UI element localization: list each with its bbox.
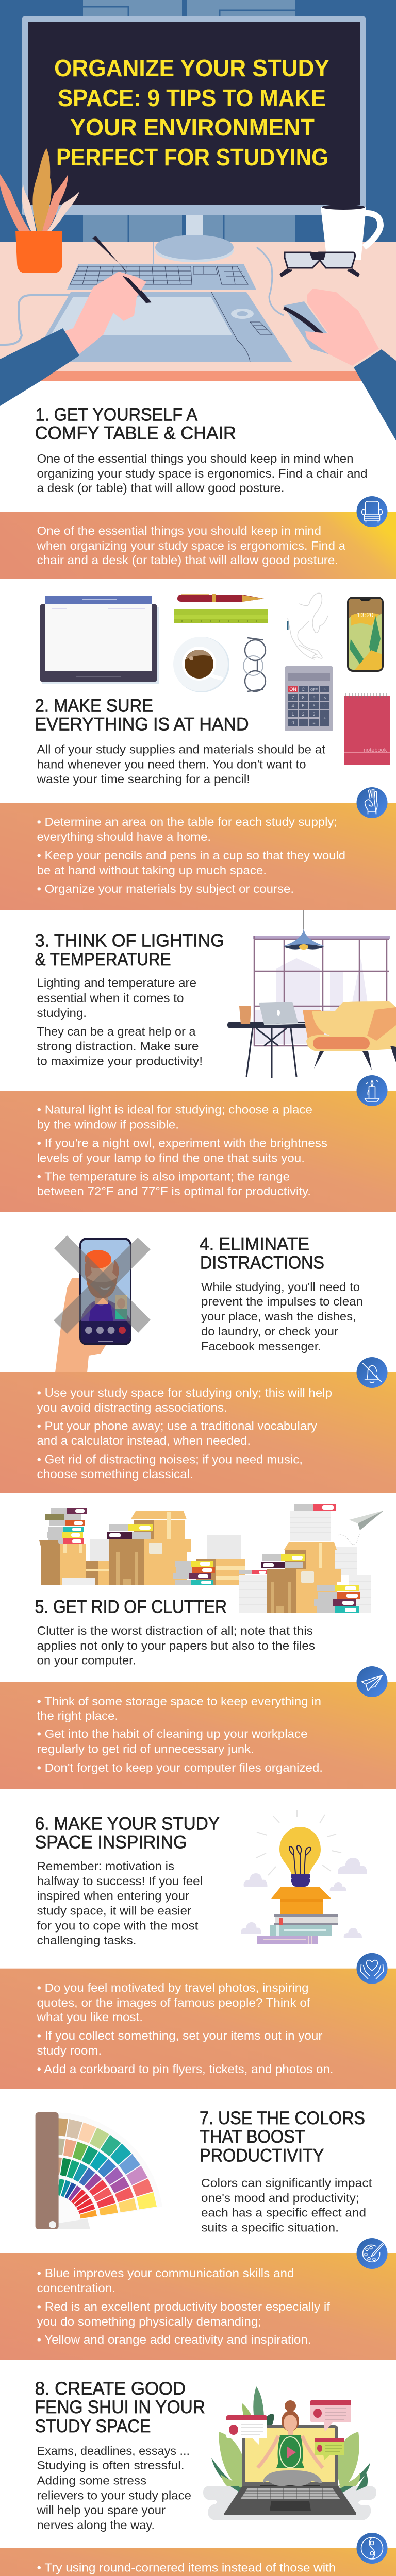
keyboard [67, 264, 256, 290]
ruler [174, 609, 268, 623]
section 1 body text [37, 452, 367, 495]
section 3 body text [37, 976, 203, 1068]
coffee mug [321, 205, 381, 260]
panel: tip 6 bullets: study room. [37, 2044, 102, 2057]
icon: muted bell [357, 1357, 388, 1388]
section 4 body text: your place, wash the dishes, [201, 1310, 356, 1323]
section 8 body text: Adding some stress [37, 2474, 146, 2487]
section 2 heading: EVERYTHING IS AT HAND [35, 715, 249, 735]
pen [177, 594, 264, 602]
section 3 body text: They can be a great help or a [37, 1025, 196, 1038]
side table [227, 1002, 315, 1078]
calculator: 8 [302, 695, 305, 700]
section 2 body text: All of your study supplies and materials should be at [37, 743, 326, 756]
section 7 heading [200, 2108, 365, 2166]
panel: tip 5 bullets: • Don't forget to keep your computer files organized. [37, 1761, 323, 1774]
section 3 body text: essential when it comes to [37, 991, 184, 1005]
calculator: 3 [312, 711, 316, 717]
section 4 body text: Facebook messenger. [201, 1340, 321, 1353]
section 1 heading: COMFY TABLE & CHAIR [35, 423, 236, 444]
section 4 heading: 4. ELIMINATE [200, 1234, 309, 1255]
pen and left hand [53, 236, 152, 354]
section 8 body text: Exams, deadlines, essays ... [37, 2444, 190, 2458]
illustration: desk items [40, 593, 390, 765]
section 8 body text: relievers to your study place [37, 2489, 191, 2502]
icon: heart in hands [357, 1953, 388, 1984]
section 8 body text: will help you spare your [36, 2503, 166, 2517]
section 8 body text [36, 2444, 191, 2532]
calculator: ON [289, 687, 296, 692]
section 6 body text: for you to cope with the most [37, 1919, 199, 1933]
panel: tip 1 summary [0, 512, 396, 579]
calculator: = [312, 720, 316, 725]
section 3 heading: 3. THINK OF LIGHTING [35, 931, 224, 951]
title: YOUR ENVIRONMENT [70, 114, 315, 141]
smartphone [347, 597, 384, 672]
calculator: × [323, 695, 326, 700]
left cardboard box [39, 1539, 112, 1585]
panel: tip 4 bullets: you avoid distracting associations. [37, 1401, 227, 1414]
panel: tip 3 bullets: • The temperature is also important; the range [37, 1170, 290, 1183]
section 7 heading: 7. USE THE COLORS [200, 2108, 365, 2128]
laptop [224, 2425, 356, 2515]
left folder stack [45, 1508, 87, 1544]
section 2 heading: 2. MAKE SURE [35, 696, 153, 716]
icon: palette [357, 2238, 388, 2269]
section 6 heading: 6. MAKE YOUR STUDY [35, 1814, 220, 1834]
section 6 body text: Remember: motivation is [37, 1859, 174, 1873]
panel: tip 3 bullets: by the window if possible. [37, 1118, 179, 1131]
section 3 heading: & TEMPERATURE [35, 950, 171, 970]
right cardboard boxes [261, 1542, 360, 1613]
section 6 body text: study space, it will be easier [37, 1904, 191, 1918]
section 6 body text: challenging tasks. [37, 1934, 136, 1947]
panel: tip 8 bullets: • Try using round-cornered items instead of those with [37, 2561, 336, 2574]
panel: tip 3 bullets: between 72°F and 77°F is optimal for productivity. [37, 1184, 311, 1198]
calculator: C [302, 687, 305, 692]
section 4 heading [200, 1234, 324, 1273]
panel: tip 6 bullets: what you like most. [36, 2010, 143, 2024]
drawing tablet [30, 292, 292, 362]
reading glasses [243, 638, 266, 691]
panel: tip 5 bullets: the right place. [37, 1709, 118, 1722]
section 6 body text: inspired when entering your [37, 1889, 189, 1903]
panel: tip 7 bullets: • Yellow and orange add creativity and inspiration. [37, 2333, 311, 2346]
panel: tip 2 bullets: • Keep your pencils and pens in a cup so that they would [37, 849, 345, 862]
section 3 body text: strong distraction. Make sure [37, 1040, 199, 1053]
section 8 heading [35, 2379, 205, 2436]
section 2 body text: hand whenever you need them. You don't want to [37, 758, 306, 771]
panel: tip 4 bullets: • Use your study space for studying only; this will help [37, 1386, 332, 1399]
panel: tip 4 bullets: • Put your phone away; use a traditional vocabulary [37, 1419, 318, 1433]
section 8 body text: Studying is often stressful. [37, 2459, 185, 2472]
panel: tip 6 bullets [0, 1969, 396, 2089]
section 3 body text: studying. [37, 1006, 87, 1020]
panel: tip 5 bullets: • Get into the habit of cleaning up your workplace [37, 1727, 307, 1740]
panel: tip 6 bullets: quotes, or the images of famous people? Think of [37, 1996, 310, 2009]
panel: tip 7 bullets: • Blue improves your communication skills and [37, 2266, 294, 2280]
chat bubbles [226, 2400, 351, 2460]
panel: tip 6 bullets: • If you collect something, set your items out in your [37, 2029, 323, 2042]
panel: tip 2 bullets [0, 803, 396, 910]
section 2 body text: waste your time searching for a pencil! [36, 772, 250, 786]
section 2 heading [35, 696, 249, 735]
illustration: phone video call crossed out [54, 1235, 151, 1372]
mouse [283, 301, 331, 354]
ceiling lamp [283, 910, 325, 950]
illustration: meditating woman on laptop [203, 2386, 376, 2520]
illustration: light bulb on box and books [241, 1810, 367, 1944]
icon: ok hand [357, 787, 388, 818]
icon: candle [357, 1075, 388, 1106]
section 8 body text: nerves along the way. [37, 2518, 155, 2532]
icon: paper plane [357, 1666, 388, 1697]
glasses [280, 252, 359, 276]
section 8 heading: 8. CREATE GOOD [35, 2379, 186, 2399]
shirt sleeves [0, 328, 396, 440]
illustration: window, lamp, table and armchair [227, 910, 396, 1078]
calculator [285, 666, 333, 731]
section 3 body text: Lighting and temperature are [37, 976, 196, 990]
section 5 heading: 5. GET RID OF CLUTTER [35, 1597, 227, 1617]
panel: tip 6 bullets: • Do you feel motivated by travel photos, inspiring [37, 1981, 308, 1994]
calculator: . [303, 720, 304, 725]
section 1 body text: One of the essential things you should keep in mind when [37, 452, 354, 465]
section 1 body text: a desk (or table) that will allow good posture. [37, 481, 285, 495]
calculator: 9 [312, 695, 316, 700]
calculator: ÷ [324, 687, 326, 692]
panel: tip 1 summary: when organizing your study space is ergonomics. Find a [36, 539, 345, 552]
section 6 body text [37, 1859, 203, 1947]
section 5 body text [37, 1624, 315, 1667]
section 1 heading: 1. GET YOURSELF A [36, 405, 198, 425]
panel: tip 7 bullets: you do something physically demanding; [37, 2315, 261, 2328]
armchair [303, 1001, 396, 1070]
calculator: 2 [302, 711, 305, 717]
calculator: 1 [291, 711, 294, 717]
calculator: - [324, 703, 326, 708]
panel: tip 7 bullets [0, 2253, 396, 2360]
plant in orange pot [0, 148, 79, 273]
panel: tip 1 summary: One of the essential things you should keep in mind [37, 524, 321, 537]
icon: armchair [357, 496, 388, 527]
right hand [305, 289, 379, 366]
panel: tip 3 bullets: • Natural light is ideal for studying; choose a place [37, 1103, 312, 1116]
panel: tip 5 bullets: regularly to get rid of unnecessary junk. [37, 1742, 254, 1756]
title [54, 55, 329, 171]
coffee cup [173, 637, 229, 692]
section 7 body text: Colors can significantly impact [201, 2176, 372, 2190]
section 4 body text [201, 1280, 363, 1353]
panel: tip 4 bullets: and a calculator instead, when needed. [37, 1434, 251, 1447]
illustration: colour fan deck [36, 2112, 162, 2232]
section 2 body text [36, 743, 326, 786]
header illustration: desk with monitor [0, 0, 396, 440]
section 5 body text: Clutter is the worst distraction of all; note that this [37, 1624, 313, 1637]
notebook: notebook [364, 747, 387, 753]
panel: tip 2 bullets: everything should have a home. [37, 830, 211, 843]
section 4 body text: prevent the impulses to clean [201, 1295, 363, 1308]
woman [258, 2400, 323, 2486]
section 6 body text: halfway to success! If you feel [37, 1874, 203, 1888]
window [253, 936, 390, 1046]
section 8 heading: FENG SHUI IN YOUR [35, 2397, 205, 2417]
calculator: 6 [312, 703, 316, 708]
section 4 body text: While studying, you'll need to [201, 1280, 360, 1294]
calculator: + [323, 716, 326, 721]
panel: tip 8 bullets [0, 2548, 396, 2576]
section 6 heading [35, 1814, 220, 1853]
tablet [40, 596, 159, 684]
panel: tip 5 bullets: • Think of some storage space to keep everything in [37, 1694, 321, 1708]
right paper stacks [239, 1504, 371, 1613]
section 7 heading: THAT BOOST [200, 2127, 305, 2147]
smartphone: 13:20 [357, 611, 374, 619]
section 3 heading [35, 931, 224, 970]
section 5 body text: applies not only to your papers but also to the files [37, 1639, 315, 1652]
illustration: boxes and folders clutter [39, 1504, 384, 1613]
section 5 body text: on your computer. [37, 1654, 136, 1667]
title: SPACE: 9 TIPS TO MAKE [58, 84, 326, 111]
calculator: 5 [302, 703, 305, 708]
panel: tip 2 bullets: be at hand without taking up much space. [37, 863, 267, 877]
section 1 heading [35, 405, 236, 444]
panel: tip 7 bullets: • Red is an excellent productivity booster especially if [37, 2300, 331, 2313]
panel: tip 3 bullets: levels of your lamp to find the one that suits you. [37, 1151, 305, 1165]
section 6 heading: SPACE INSPIRING [35, 1833, 187, 1853]
title: ORGANIZE YOUR STUDY [54, 55, 329, 81]
section 4 heading: DISTRACTIONS [200, 1253, 324, 1273]
panel: tip 4 bullets [0, 1372, 396, 1493]
calculator: OFF [310, 688, 318, 692]
section 7 body text: each has a specific effect and [201, 2206, 366, 2219]
icon: yin yang [357, 2533, 388, 2564]
section 7 body text: suits a specific situation. [201, 2221, 339, 2234]
panel: tip 3 bullets [0, 1091, 396, 1212]
section 7 body text: one's mood and productivity; [201, 2191, 359, 2205]
panel: tip 4 bullets: choose something classical. [37, 1467, 193, 1481]
section 7 body text [201, 2176, 372, 2234]
section 8 heading: STUDY SPACE [35, 2416, 151, 2436]
earphones [288, 593, 328, 659]
panel: tip 4 bullets: • Get rid of distracting noises; if you need music, [37, 1453, 303, 1466]
panel: tip 2 bullets: • Determine an area on the table for each study supply; [37, 815, 337, 828]
section 7 heading: PRODUCTIVITY [200, 2146, 324, 2166]
section 3 body text: to maximize your productivity! [37, 1055, 203, 1068]
leaves [211, 2386, 370, 2494]
panel: tip 2 bullets: • Organize your materials by subject or course. [37, 882, 294, 895]
calculator: 4 [291, 703, 294, 708]
title: PERFECT FOR STUDYING [56, 144, 328, 171]
panel: tip 3 bullets: • If you're a night owl, experiment with the brightness [37, 1137, 327, 1150]
notebook [344, 693, 390, 765]
panel: tip 6 bullets: • Add a corkboard to pin flyers, tickets, and photos on. [37, 2062, 333, 2076]
section 1 body text: organizing your study space is ergonomics. Find a chair and [37, 467, 367, 480]
centre cardboard boxes [107, 1511, 245, 1585]
calculator: 7 [291, 695, 294, 700]
calculator: 0 [291, 720, 294, 725]
panel: tip 7 bullets: concentration. [37, 2281, 116, 2295]
section 4 body text: do laundry, or check your [201, 1325, 338, 1338]
panel: tip 5 bullets [0, 1682, 396, 1789]
paper plane [338, 1511, 384, 1545]
panel: tip 1 summary: chair and a desk (or table) that will allow good posture. [37, 553, 338, 567]
